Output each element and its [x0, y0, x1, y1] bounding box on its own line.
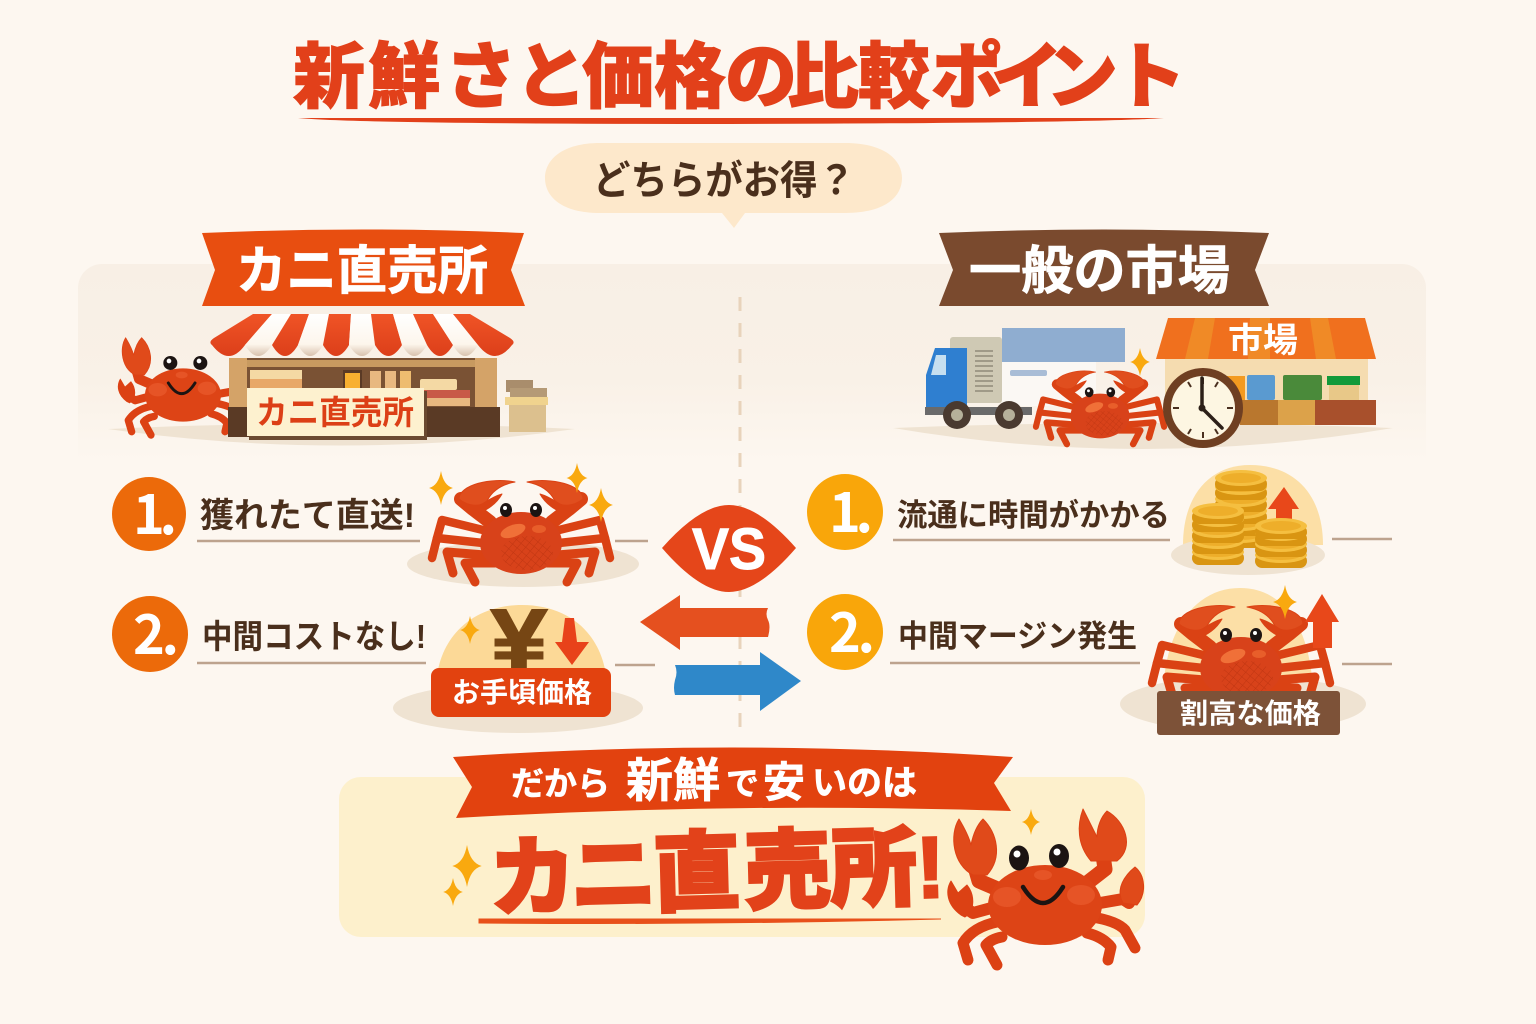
shop sign: カニ直売所	[256, 394, 414, 431]
ribbon: conclusion lead-in: 安	[763, 759, 805, 806]
arrow: left red	[640, 595, 770, 650]
red crab	[1036, 371, 1164, 444]
conclusion main text: カニ直売所!	[488, 819, 946, 928]
sparkle	[1130, 348, 1150, 376]
wooden boxes	[505, 380, 548, 432]
ribbon: conclusion lead-in: だから	[511, 765, 610, 802]
point 1 text: 流通に時間がかかる	[897, 498, 1170, 533]
expensive price label	[1157, 691, 1340, 735]
ribbon: conclusion lead-in: いのは	[812, 764, 917, 803]
VS badge: VS	[692, 517, 766, 582]
ribbon: 一般の市場 heading	[939, 230, 1269, 306]
right point 2	[807, 585, 1392, 735]
number badge 1: 1.	[133, 471, 177, 550]
shop sign	[247, 388, 427, 440]
speech bubble: question	[545, 143, 902, 228]
affordable price label	[431, 668, 611, 717]
sparkles: conclusion	[443, 809, 1040, 906]
market building: 市場	[1228, 322, 1298, 360]
ribbon: 一般の市場 heading: 一般の市場	[969, 243, 1230, 301]
point 1 underline	[197, 540, 648, 542]
striped awning	[210, 314, 514, 356]
number badge 2	[112, 591, 188, 672]
ribbon: カニ直売所 heading	[202, 230, 525, 306]
ribbon: カニ直売所 heading: カニ直売所	[236, 243, 488, 301]
ribbon: conclusion lead-in: 新鮮	[626, 754, 720, 807]
point 2 underline	[890, 663, 1392, 664]
affordable price illustration	[393, 592, 643, 733]
affordable price illustration: ¥	[491, 592, 547, 686]
right point 1	[807, 465, 1392, 575]
panel: comparison background	[78, 264, 1426, 734]
arrow: right blue	[674, 652, 801, 711]
stall ground shadow	[108, 424, 575, 446]
speech bubble: question: どちらがお得？	[593, 159, 855, 203]
point 1 underline	[893, 539, 1392, 540]
number badge 2: 2.	[829, 589, 875, 668]
crab mascot: conclusion	[948, 809, 1144, 965]
wall clock	[1163, 368, 1243, 448]
small crab mascot	[118, 338, 243, 435]
number badge 1: 1.	[829, 469, 873, 548]
number badge 1	[807, 469, 883, 550]
stall structure	[228, 358, 500, 437]
point 2 text: 中間マージン発生	[898, 619, 1137, 654]
number badge 1	[112, 471, 186, 551]
ribbon: conclusion lead-in: で	[726, 765, 759, 802]
market building	[1156, 318, 1376, 425]
number badge 2: 2.	[133, 591, 179, 670]
expensive price label: 割高な価格	[1180, 698, 1321, 729]
fresh crab illustration	[407, 463, 639, 587]
ribbon: conclusion lead-in	[453, 748, 1013, 818]
left point 1	[112, 463, 648, 587]
point 1 text: 獲れたて直送!	[200, 497, 415, 535]
left point 2	[112, 591, 655, 733]
title: 新鮮さと価格の比較ポイント	[293, 38, 1186, 118]
point 2 text: 中間コストなし!	[202, 618, 426, 655]
illustration: direct sales stall	[108, 314, 575, 446]
affordable price label: お手頃価格	[452, 677, 592, 708]
expensive crab illustration	[1120, 585, 1366, 735]
VS badge	[662, 505, 796, 592]
coins illustration	[1171, 465, 1325, 575]
point 2 underline	[197, 663, 655, 665]
delivery truck	[925, 328, 1125, 429]
market ground shadow	[893, 423, 1393, 449]
panel: conclusion	[339, 777, 1145, 937]
number badge 2	[807, 589, 883, 670]
illustration: truck, crab, market and clock	[893, 318, 1393, 449]
center dashed divider	[738, 297, 742, 732]
